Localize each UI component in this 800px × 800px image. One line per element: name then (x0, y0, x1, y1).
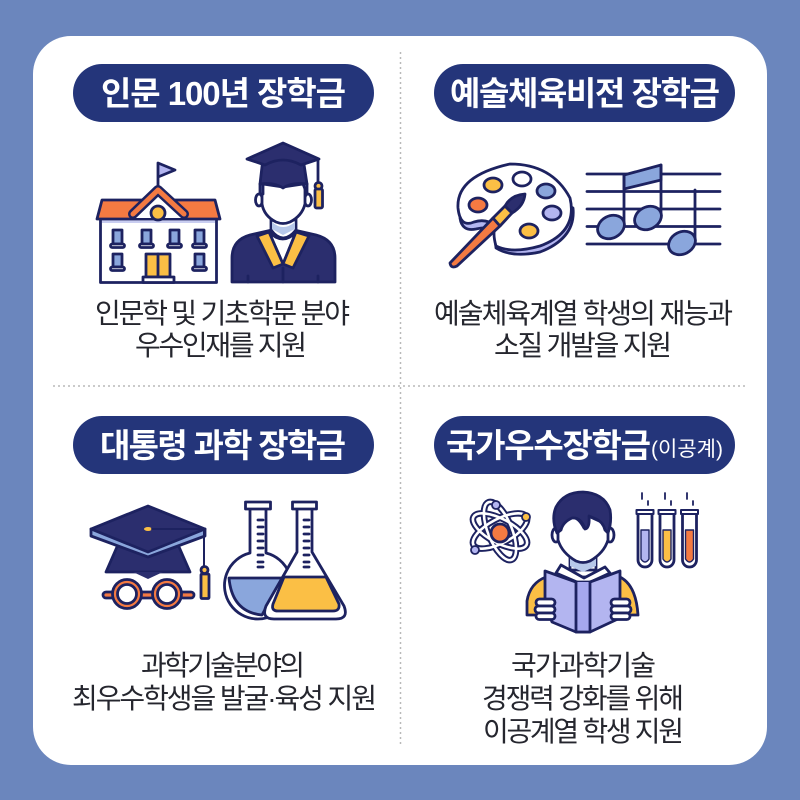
heading: arts (434, 64, 735, 122)
heading: national excellence (434, 416, 735, 474)
panel: humanities scholarship (73, 64, 374, 361)
text: presidential description (72, 650, 377, 714)
text: national excellence description: 경쟁력 강화를 위해 (482, 683, 684, 714)
heading: arts: 예술체육비전 장학금 (450, 75, 720, 112)
text: humanities description: 우수인재를 지원 (135, 330, 307, 361)
heading: presidential (73, 416, 374, 474)
icon: music notes (587, 165, 720, 259)
heading: national excellence: (이공계) (651, 438, 723, 461)
text: national excellence description (482, 650, 684, 747)
icon: cap and glasses (91, 506, 209, 608)
text: humanities description: 인문학 및 기초학문 분야 (95, 298, 350, 329)
text: presidential description: 과학기술분야의 (141, 650, 305, 681)
icon: test tubes (636, 493, 698, 567)
text: arts description: 예술체육계열 학생의 재능과 (434, 298, 733, 329)
icon: student reading book (527, 492, 638, 632)
panel: arts and sports scholarship (434, 64, 735, 361)
icon: palette and brush (450, 164, 573, 267)
heading: national excellence: 국가우수장학금 (446, 427, 651, 464)
icon: flasks (224, 502, 345, 619)
text: presidential description: 최우수학생을 발굴·육성 지원 (72, 683, 377, 714)
text: arts description (434, 298, 733, 361)
icon: school building (97, 163, 220, 282)
icon: atom (468, 498, 532, 564)
heading: humanities: 인문 100년 장학금 (101, 75, 346, 112)
icon: graduate (232, 143, 335, 282)
panel: presidential science scholarship (72, 416, 377, 714)
text: national excellence description: 이공계열 학생 지원 (483, 716, 684, 747)
heading: humanities (73, 64, 374, 122)
panel: national excellence scholarship (434, 416, 735, 747)
heading: presidential: 대통령 과학 장학금 (100, 427, 346, 464)
text: arts description: 소질 개발을 지원 (494, 330, 672, 361)
text: national excellence description: 국가과학기술 (511, 650, 656, 681)
text: humanities description (95, 298, 350, 361)
